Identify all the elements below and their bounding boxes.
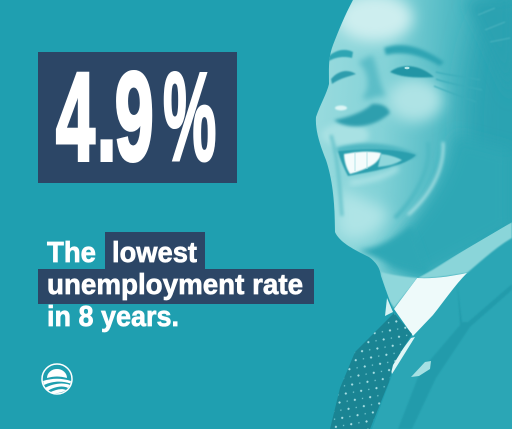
text line: The: The [47,237,96,269]
headline [38,232,314,333]
forehead highlight [337,0,413,42]
right eye [390,66,434,77]
chin and lower face light [338,190,388,240]
icon: sunrise logo [42,364,72,394]
stat value: 4.9: 4.9 [56,48,154,187]
suit jacket [372,238,512,429]
cheek fold shadow [395,142,429,218]
field stripes [43,379,71,393]
lower lip highlight [350,168,398,183]
text line: unemployment rate: unemployment rate [47,269,303,301]
tooth gaps [355,152,367,171]
jacket lapel shading [398,281,512,429]
shirt strip under collar [390,337,415,374]
teeth [344,152,381,174]
nose and lip light [321,123,369,147]
crow's feet wrinkles [434,71,481,94]
shirt collar band [417,222,512,278]
head [310,0,512,308]
neck lower shadow [358,227,425,274]
sun [47,369,67,378]
neck [335,100,512,310]
hair texture [478,8,510,42]
left shirt collar strip [385,298,393,316]
back teeth [378,154,402,167]
stat value: percent sign: % [163,47,216,187]
neck highlight [381,272,418,308]
photo: smiling man in suit [310,0,512,429]
hair [466,0,492,27]
white shirt collar [394,273,467,336]
mouth opening [338,149,416,176]
highlight: unemployment rate [38,269,314,304]
smile crease [408,142,443,215]
jaw mid tone [385,135,512,280]
nose underside shadow [334,104,390,126]
lapel pin [411,361,431,377]
left eye [331,71,356,84]
nose side shadow [358,55,386,99]
upper lip shadow [336,143,418,159]
necktie [330,313,412,429]
left brow [329,50,353,61]
text line: in 8 years.: in 8 years. [47,301,179,333]
right side shadow of face [465,0,512,270]
left jaw edge shadow [331,135,342,216]
right brow [384,45,444,66]
cheek highlight [387,78,443,122]
text line: lowest: lowest [112,237,197,269]
eye glint [404,67,410,69]
highlight: lowest [105,232,205,270]
nose tip highlight [335,106,347,110]
stat box: 4.9% [38,47,237,187]
